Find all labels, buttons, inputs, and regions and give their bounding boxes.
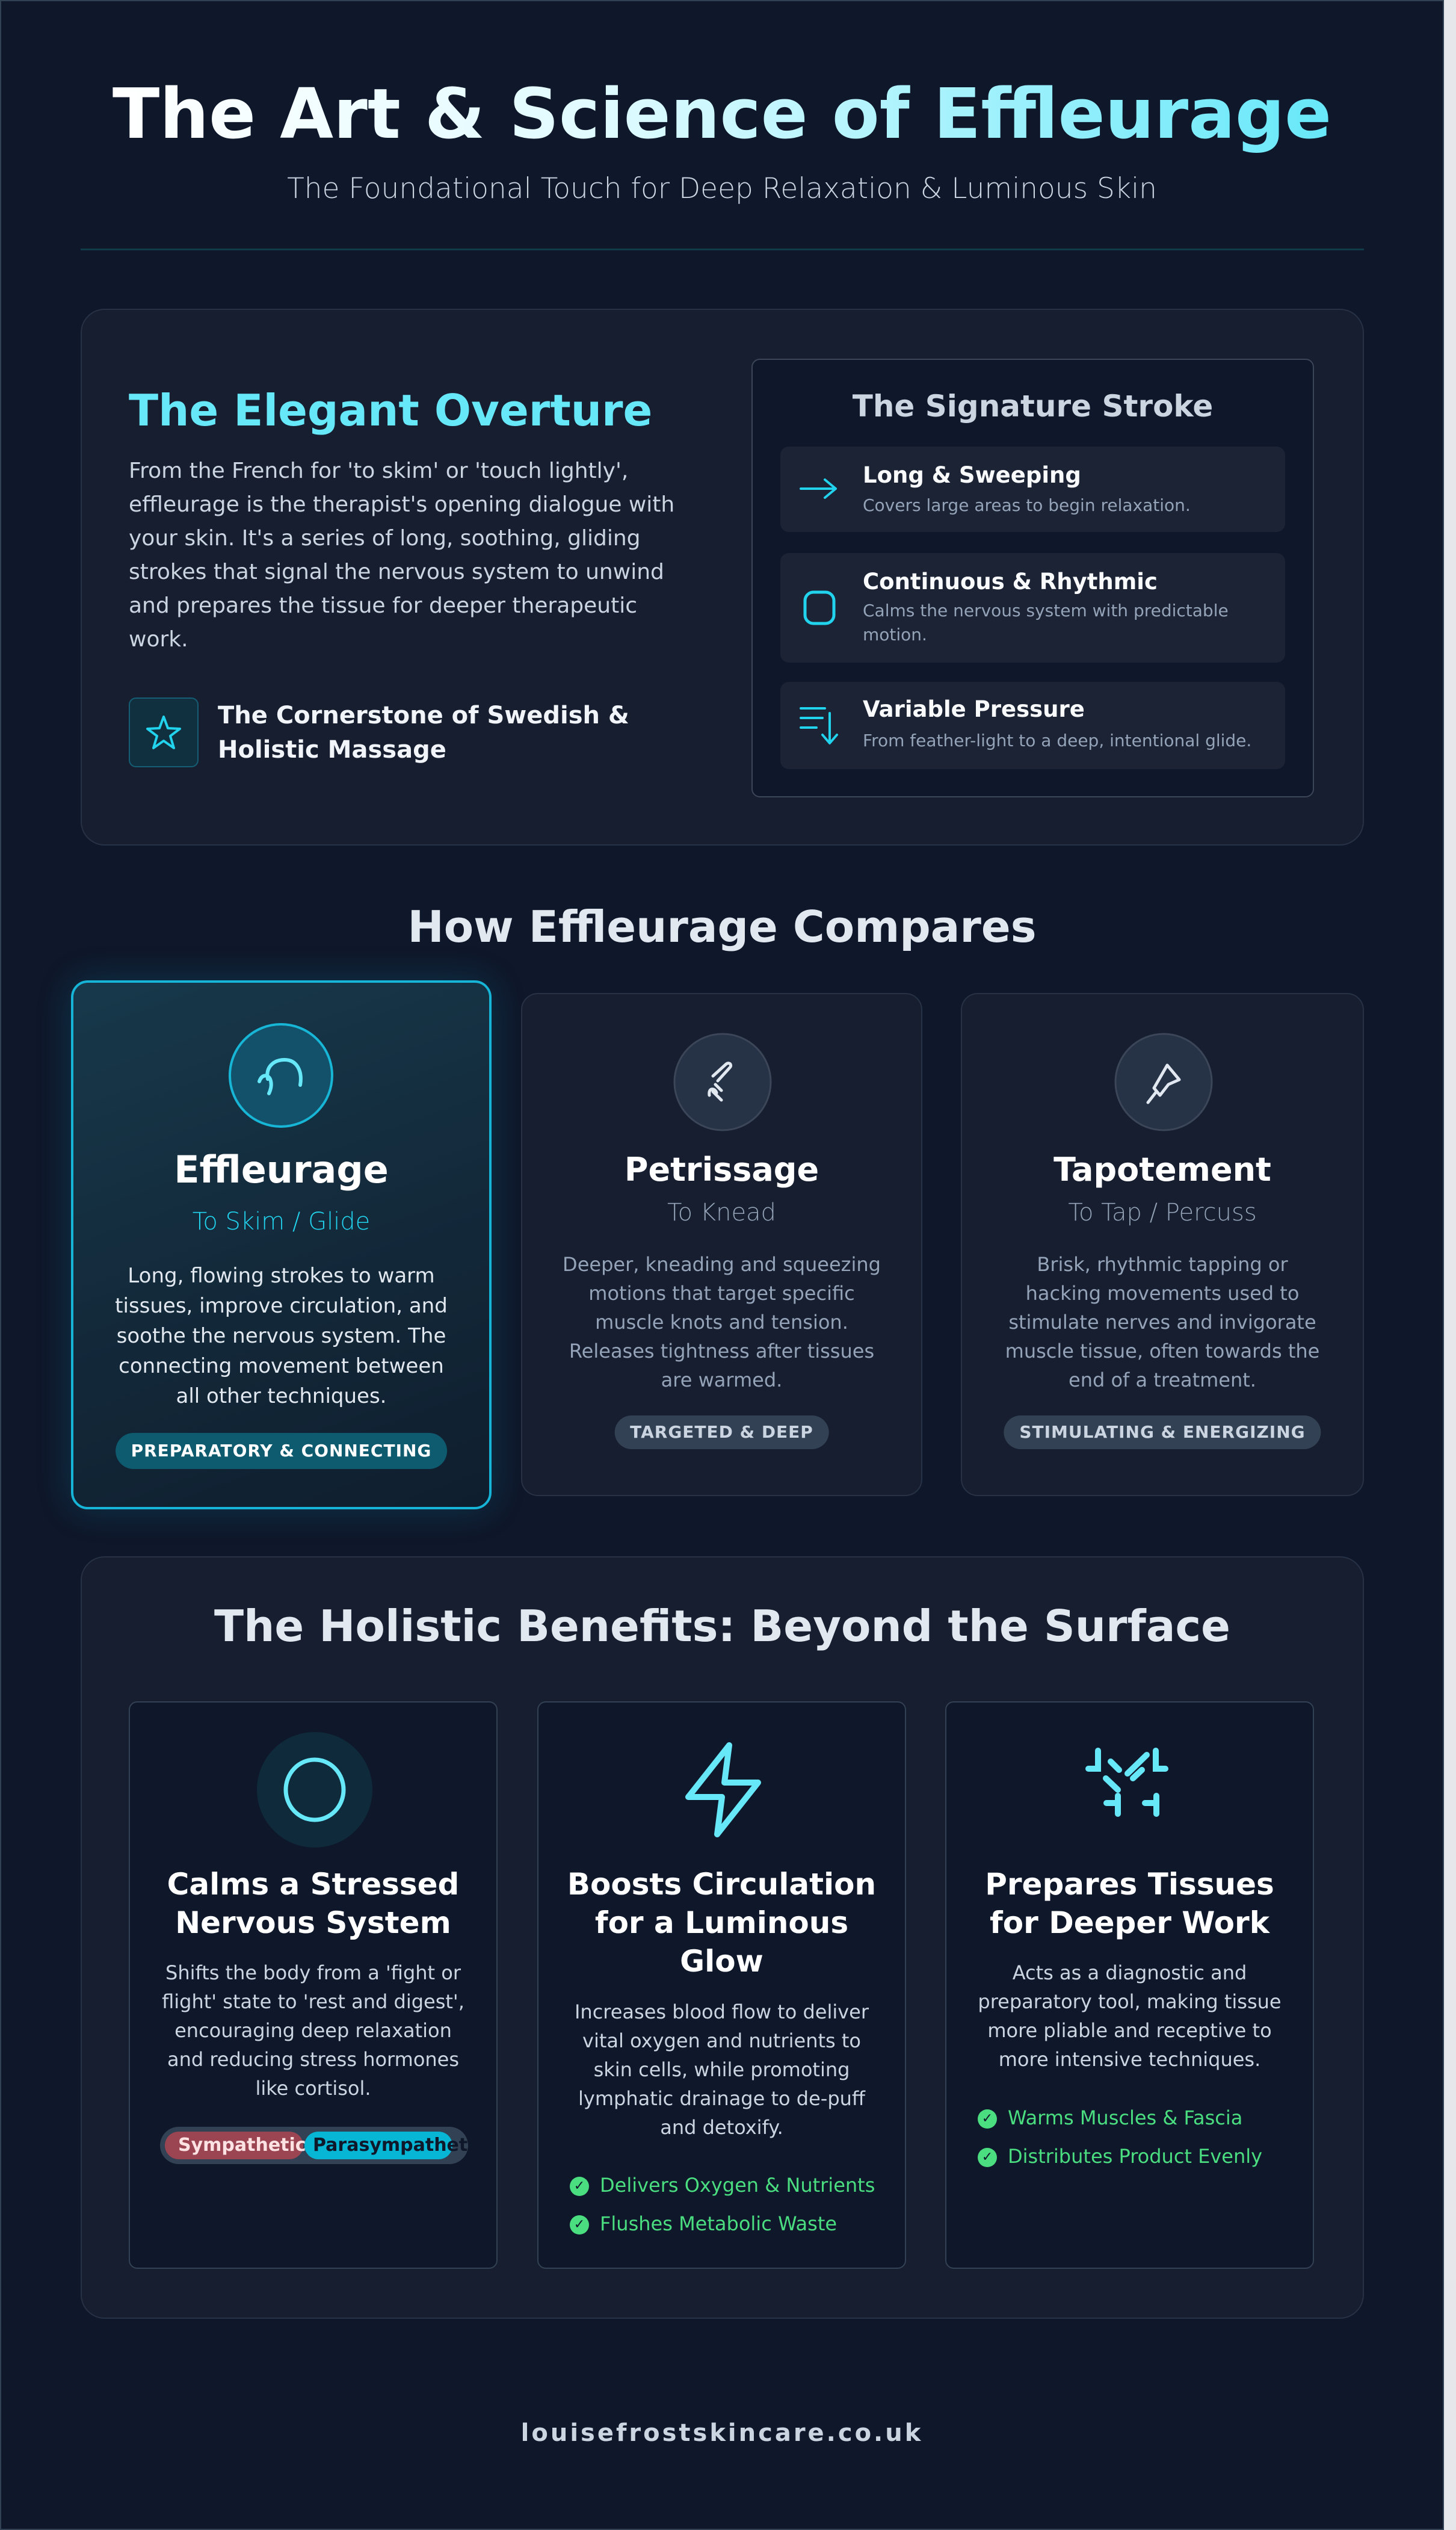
item: continuous & rhythmic: Continuous & Rhythmic	[863, 569, 1158, 595]
card: petrissage: Petrissage	[625, 1151, 819, 1189]
checklist: Delivers Oxygen & Nutrients	[600, 2174, 875, 2197]
benefit: calms: Calms a Stressed	[167, 1867, 459, 1902]
badge: TARGETED & DEEP	[630, 1422, 813, 1442]
benefit: circulation: Flushes Metabolic Waste	[600, 2212, 837, 2235]
item: long & sweeping: Long & Sweeping	[863, 462, 1081, 488]
benefit: prepares tissues: for Deeper Work	[990, 1905, 1269, 1940]
icon: fibers	[1085, 1748, 1168, 1817]
benefit: calms	[129, 1701, 498, 2269]
text: cornerstone: The Cornerstone of Swedish & Holistic Massage	[218, 702, 629, 764]
footer: louisefrostskincare.co.uk	[521, 2419, 923, 2447]
badge	[116, 1433, 447, 1469]
card: tapotement: To Tap / Percuss	[1068, 1199, 1257, 1226]
benefit: circulation: Boosts Circulation	[567, 1867, 876, 1902]
item: variable pressure: From feather-light to a deep, intentional glide.	[863, 731, 1251, 750]
benefit: prepares tissues	[945, 1701, 1314, 2269]
heading: The Signature Stroke	[853, 389, 1213, 424]
benefit: circulation: ✓	[574, 2217, 585, 2232]
checklist: ✓	[982, 2111, 993, 2126]
pill: sympathetic / parasympathetic	[160, 2127, 468, 2164]
icon: rounded square	[804, 591, 835, 625]
benefit: circulation: for a Luminous	[595, 1905, 848, 1940]
benefit: calms: Nervous System	[175, 1905, 451, 1940]
subtitle: The Foundational Touch for Deep Relaxation & Luminous Skin	[287, 172, 1157, 205]
panel: holistic benefits	[81, 1556, 1364, 2319]
icon: swirl	[229, 1023, 333, 1128]
card: petrissage: To Knead	[667, 1199, 776, 1226]
text: intro paragraph: From the French for 'to skim' or 'touch lightly', effleurage is the therapist's opening dialogue with your skin. It's a series of long, soothing, gliding strokes that signal the nervous system to unwind and prepares the tissue for deeper therapeutic work.	[129, 459, 674, 652]
benefit: calms: Shifts the body from a 'fight or flight' state to 'rest and digest', encouraging deep relaxation and reducing stress hormones like cortisol.	[162, 1961, 464, 2100]
item: long & sweeping: Covers large areas to begin relaxation.	[863, 495, 1191, 515]
pill: sympathetic / parasympathetic: Sympathetic	[178, 2135, 306, 2156]
badge: STIMULATING & ENERGIZING	[1019, 1422, 1306, 1442]
item: long & sweeping	[780, 447, 1285, 532]
item: variable pressure	[780, 682, 1285, 769]
benefit: circulation: Increases blood flow to deliver vital oxygen and nutrients to skin cells, while promoting lymphatic drainage to de-puff and detoxify.	[575, 2000, 869, 2139]
benefit: circulation: Glow	[680, 1944, 763, 1979]
card: tapotement: Tapotement	[1053, 1151, 1271, 1189]
icon: star	[129, 697, 199, 767]
icon: lightning	[685, 1742, 761, 1837]
icon: arrow	[800, 478, 838, 500]
benefit: prepares tissues: Prepares Tissues	[985, 1867, 1274, 1902]
card: tapotement	[961, 993, 1364, 1496]
panel: elegant overture	[81, 309, 1364, 846]
icon: knead	[674, 1033, 771, 1131]
checklist: ✓	[574, 2179, 585, 2194]
icon: circle	[257, 1732, 372, 1848]
icon: pin	[1114, 1033, 1213, 1131]
card: effleurage: Effleurage	[174, 1148, 389, 1192]
heading: The Elegant Overture: The Elegant Overture	[129, 385, 652, 436]
benefit: circulation	[537, 1701, 906, 2269]
card: effleurage: Long, flowing strokes to warm tissues, improve circulation, and soothe the nervous system. The connecting movement between all other techniques.	[115, 1264, 448, 1408]
title: The Art & Science of Effleurage	[113, 74, 1331, 155]
card: effleurage	[71, 980, 492, 1509]
card: tapotement: Brisk, rhythmic tapping or hacking movements used to stimulate nerves and invigorate muscle tissue, often towards the end of a treatment.	[1005, 1253, 1319, 1391]
item: continuous & rhythmic	[780, 553, 1285, 663]
heading: The Holistic Benefits: Beyond the Surface	[214, 1601, 1230, 1651]
checklist: Warms Muscles & Fascia	[1008, 2106, 1242, 2129]
heading: How Effleurage Compares: How Effleurage Compares	[407, 902, 1037, 952]
badge: PREPARATORY & CONNECTING	[131, 1441, 431, 1461]
benefit: prepares tissues: ✓	[982, 2150, 993, 2165]
panel: signature stroke	[751, 359, 1314, 797]
card: effleurage: To Skim / Glide	[193, 1208, 370, 1236]
item: variable pressure: Variable Pressure	[863, 696, 1085, 722]
item: continuous & rhythmic: Calms the nervous system with predictable motion.	[863, 601, 1229, 645]
badge	[614, 1415, 829, 1449]
card: petrissage	[521, 993, 922, 1496]
benefit: prepares tissues: Distributes Product Evenly	[1008, 2145, 1262, 2168]
icon: pressure	[800, 707, 839, 745]
badge	[1004, 1415, 1321, 1449]
benefit: prepares tissues: Acts as a diagnostic and preparatory tool, making tissue more pliable and receptive to more intensive techniques.	[978, 1961, 1282, 2071]
card: petrissage: Deeper, kneading and squeezing motions that target specific muscle knots and tension. Releases tightness after tissues are warmed.	[563, 1253, 881, 1391]
